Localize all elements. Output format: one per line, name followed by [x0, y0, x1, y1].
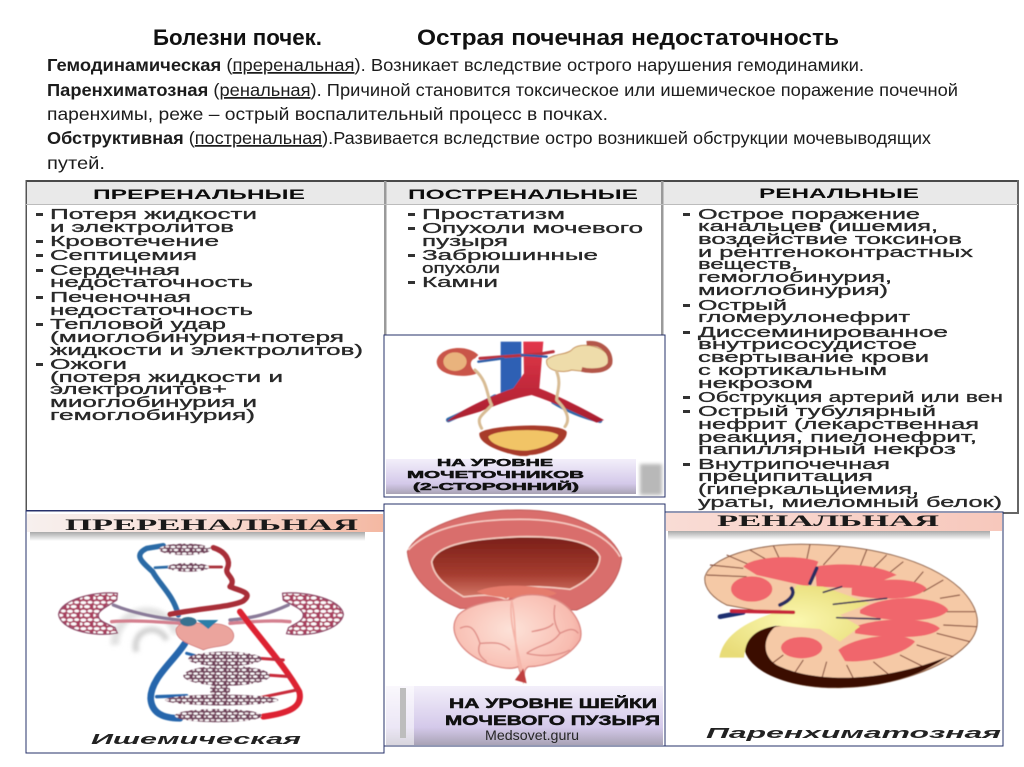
bullet list: Острый тубулярный — [698, 404, 936, 420]
bullet list: Острое поражение — [698, 207, 920, 223]
bullet list: гемоглобинурия) — [50, 408, 255, 424]
label band — [386, 686, 663, 745]
bullet list: папиллярный некроз — [698, 442, 957, 458]
panel header band — [666, 513, 1002, 540]
diagram: kidney section — [705, 544, 977, 688]
causes table frame — [26, 180, 1019, 514]
column heading: ПРЕРЕНАЛЬНЫЕ — [93, 186, 305, 202]
bullet list: Простатизм — [422, 207, 565, 223]
column heading: РЕНАЛЬНЫЕ — [759, 185, 919, 201]
intro text block — [47, 55, 958, 173]
bullet list: Потеря жидкости — [50, 207, 257, 223]
diagram: bladder and prostate — [407, 510, 622, 683]
column: ренальные причины — [683, 185, 1003, 511]
bullet list: Внутрипочечная — [698, 457, 890, 473]
bullet list: Забрюшинные — [422, 248, 598, 264]
bullet list: нефрит (лекарственная — [698, 417, 979, 433]
bullet list: Острый — [698, 298, 787, 314]
panel: на уровне шейки мочевого пузыря — [384, 504, 665, 746]
bullet list: гемоглобинурия, — [698, 270, 892, 286]
bullet list: ураты, миеломный белок) — [698, 495, 1002, 511]
panel: на уровне мочеточников — [384, 335, 665, 497]
bullet list: (миоглобинурия+потеря — [50, 330, 344, 346]
page title — [153, 25, 839, 50]
column: постренальные причины — [408, 186, 643, 291]
bullet list: свертывание крови — [698, 350, 929, 366]
panel header band — [27, 514, 383, 541]
watermark: Medsovet.guru — [485, 728, 579, 743]
bullet list: (гиперкальциемия, — [698, 482, 919, 498]
bullet list: жидкости и электролитов) — [50, 343, 363, 359]
bullet list: Сердечная — [50, 263, 180, 279]
bullet list: недостаточность — [50, 303, 253, 319]
bullet list — [408, 207, 643, 291]
bullet list: Септицемия — [50, 248, 197, 264]
intro text block: паренхимы, реже – острый воспалительный процесс в почках. — [47, 104, 608, 124]
bullet list: некрозом — [698, 376, 813, 392]
diagram: urinary tract — [437, 342, 610, 456]
panel: преренальная — [26, 511, 384, 753]
bullet list: внутрисосудистое — [698, 337, 917, 353]
label band: МОЧЕВОГО ПУЗЫРЯ — [445, 712, 660, 728]
bullet list: миоглобинурия и — [50, 395, 257, 411]
bullet list: недостаточность — [50, 275, 253, 291]
caption: Паренхиматозная — [706, 725, 1001, 742]
bullet list — [683, 207, 1003, 511]
bullet list: Ожоги — [50, 357, 127, 373]
intro text block: Гемодинамическая (преренальная ). Возникает вследствие острого нарушения гемодинамики. — [47, 55, 864, 75]
column: преренальные причины — [36, 186, 363, 424]
page title: Болезни почек. — [153, 25, 322, 50]
bullet list: с кортикальным — [698, 363, 887, 379]
bullet list: и рентгеноконтрастных — [698, 245, 974, 261]
bullet list: Кровотечение — [50, 234, 219, 250]
label band: НА УРОВНЕ — [437, 457, 553, 469]
bullet list: канальцев (ишемия, — [698, 219, 938, 235]
intro text block: Обструктивная (постренальная).Развивается вследствие остро возникшей обструкции мочевыводящих — [47, 128, 931, 148]
bullet list: опухоли — [422, 261, 500, 277]
bullet list: веществ, — [698, 257, 798, 273]
bullet list: Диссеминированное — [698, 325, 948, 341]
bullet list — [36, 207, 363, 424]
caption: Ишемическая — [91, 731, 301, 748]
bullet list: Тепловой удар — [50, 317, 226, 333]
bullet list: гломерулонефрит — [698, 310, 911, 326]
panel header band: ПРЕРЕНАЛЬНАЯ — [65, 517, 359, 534]
diagram: circulation — [59, 544, 343, 722]
intro text block: Паренхиматозная (ренальная). Причиной становится токсическое или ишемическое поражение почечной — [47, 80, 958, 100]
panel: ренальная — [665, 512, 1003, 746]
bullet list: и электролитов — [50, 220, 235, 236]
bullet list: электролитов+ — [50, 382, 227, 398]
bullet list: преципитация — [698, 469, 873, 485]
bullet list: реакция, пиелонефрит, — [698, 430, 977, 446]
bullet list: Печеночная — [50, 290, 191, 306]
intro text block: путей. — [47, 153, 105, 173]
label band — [386, 457, 662, 495]
label band: МОЧЕТОЧНИКОВ — [407, 469, 585, 481]
label band: (2-СТОРОННИЙ) — [413, 480, 579, 493]
bullet list: Камни — [422, 275, 498, 291]
column heading: ПОСТРЕНАЛЬНЫЕ — [408, 186, 638, 202]
bullet list: воздействие токсинов — [698, 232, 963, 248]
bullet list: пузыря — [422, 234, 508, 250]
bullet list: миоглобинурия) — [698, 283, 888, 299]
bullet list: (потеря жидкости и — [50, 370, 283, 386]
page title: Острая почечная недостаточность — [417, 25, 839, 50]
label band: НА УРОВНЕ ШЕЙКИ — [449, 694, 657, 711]
panel header band: РЕНАЛЬНАЯ — [717, 513, 940, 530]
bullet list: Обструкция артерий или вен — [698, 390, 1003, 406]
bullet list: Опухоли мочевого — [422, 221, 643, 237]
